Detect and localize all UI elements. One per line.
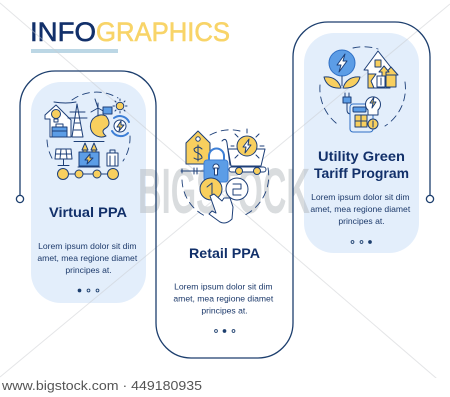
text block: Retail PPA description: Lorem ipsum dolor sit dim — [174, 282, 272, 292]
heading: Utility Green Tariff Program: Tariff Program — [314, 165, 409, 181]
heading: Virtual PPA: Virtual PPA — [49, 204, 127, 220]
text block: Virtual PPA description: amet, mea regione diamet — [37, 253, 138, 263]
text block: Utility Green description: amet, mea regione diamet — [310, 204, 411, 214]
heading: Utility Green Tariff Program: Utility Green — [318, 148, 405, 164]
panel: left tinted background — [31, 82, 146, 303]
text block: Retail PPA description: principes at. — [201, 306, 248, 316]
pagination dots: step 1 — [78, 289, 99, 292]
text block: Retail PPA description: amet, mea regione diamet — [173, 294, 274, 304]
icon: utility green tariff bundle — [320, 47, 405, 132]
pagination dots: step 3 — [351, 241, 371, 243]
title: INFO — [30, 17, 96, 47]
title — [30, 17, 230, 47]
text block: Virtual PPA description: Lorem ipsum dolor sit dim — [38, 241, 136, 251]
text block: Virtual PPA description: principes at. — [65, 265, 112, 275]
heading: Utility Green Tariff Program — [314, 148, 409, 181]
text block: Utility Green description: principes at. — [338, 216, 385, 226]
watermark caption: www.bigstock.com · 449180935 — [1, 378, 202, 393]
connecting card outline — [16, 22, 434, 358]
title: GRAPHICS — [96, 17, 230, 47]
heading: Retail PPA: Retail PPA — [189, 245, 260, 261]
pagination dots: step 2 — [215, 330, 235, 332]
panel: right tinted background — [304, 33, 419, 253]
icon: retail PPA tag, lock, cart — [181, 129, 269, 223]
icon: virtual PPA energy assets — [45, 92, 130, 180]
text block: Utility Green description: Lorem ipsum dolor sit dim — [311, 192, 410, 202]
title underline — [31, 49, 118, 53]
watermark footer band — [0, 378, 450, 397]
